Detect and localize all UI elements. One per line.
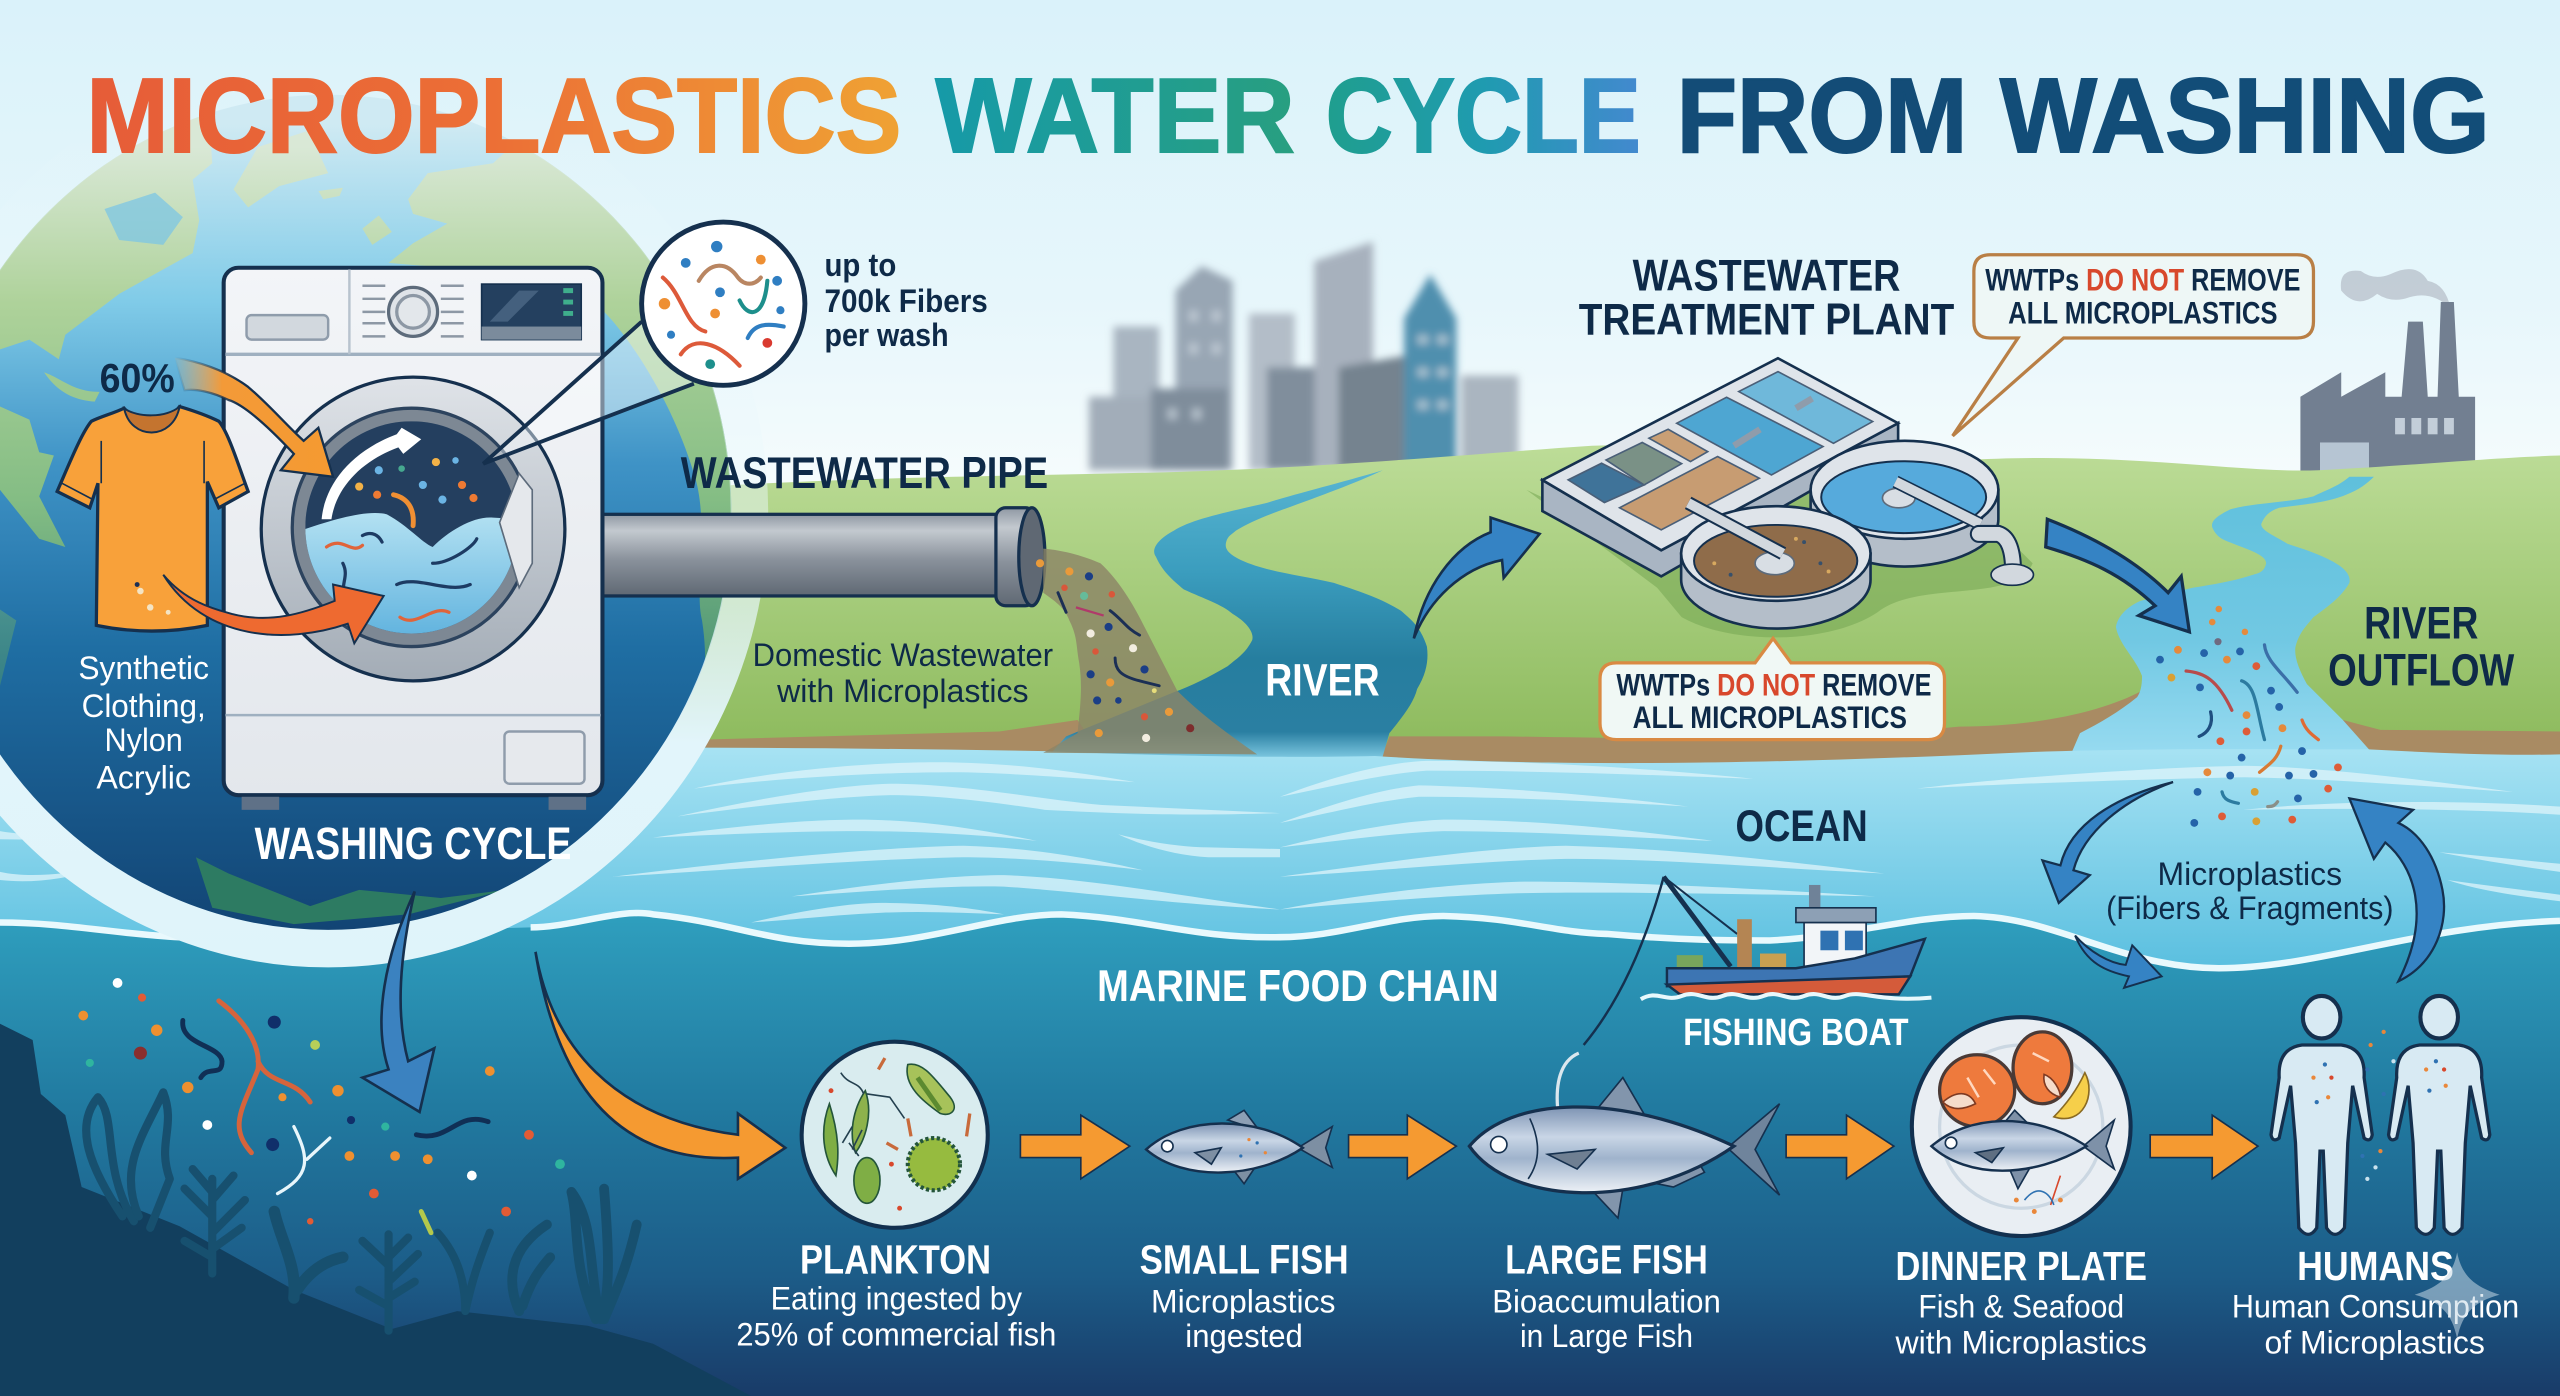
orange arrow to plankton: [536, 952, 785, 1179]
flow arrow 4: [2150, 1115, 2258, 1179]
marine food chain heading: MARINE FOOD CHAIN: [1097, 962, 1499, 1011]
callout: upper warning: [1953, 255, 2313, 436]
arrow: microplastics to sea: [2075, 936, 2162, 988]
flow arrow 2: [1349, 1115, 1456, 1179]
arrow: shirt fibres to water: [163, 575, 384, 643]
dinner plate label: with Microplastics: [1895, 1324, 2147, 1361]
waterline: [0, 913, 2560, 968]
microplastics label: (Fibers & Fragments): [2106, 889, 2393, 926]
title: [87, 57, 2490, 175]
ocean label: OCEAN: [1736, 802, 1868, 851]
sky background: [0, 0, 2560, 490]
river outflow label: [2328, 597, 2515, 696]
small fish label: [1140, 1237, 1349, 1354]
underwater body: [0, 913, 2560, 1396]
clothing label: Acrylic: [96, 759, 191, 796]
large fish label: in Large Fish: [1520, 1317, 1693, 1354]
bubble label: per wash: [824, 316, 949, 353]
microplastics label: [2106, 855, 2393, 926]
clothing label: [78, 649, 209, 796]
factory with smoke: [2300, 269, 2475, 475]
humans label: HUMANS: [2297, 1243, 2454, 1289]
city river: [1038, 470, 1427, 767]
globe ring: [0, 77, 749, 949]
river outflow label: OUTFLOW: [2328, 645, 2515, 696]
title: FROM: [1677, 57, 1967, 175]
drum: [305, 421, 522, 640]
domestic wastewater label: Domestic Wastewater: [753, 636, 1053, 673]
arrow: river to plant: [1414, 518, 1540, 638]
human right: [2389, 996, 2490, 1234]
humans label: Human Consumption: [2232, 1288, 2519, 1325]
wastewater pipe heading: WASTEWATER PIPE: [681, 449, 1048, 498]
wastewater pipe: [602, 508, 1045, 606]
plant heading: WASTEWATER: [1633, 252, 1900, 301]
small fish label: Microplastics: [1151, 1283, 1336, 1320]
spin arrow: [322, 428, 421, 519]
humans label: of Microplastics: [2264, 1324, 2485, 1361]
clothing label: Nylon: [104, 721, 183, 758]
title: WATER: [936, 57, 1295, 175]
dinner plate label: [1895, 1243, 2147, 1361]
plankton circle: [802, 1042, 988, 1228]
detergent drawer: [247, 315, 328, 340]
ocean surface: [0, 748, 2560, 980]
river outflow label: RIVER: [2364, 597, 2478, 648]
title: CYCLE: [1326, 57, 1641, 175]
arrow: plant to outflow: [2046, 519, 2189, 632]
plant heading: [1579, 252, 1954, 345]
callout: upper warning: WWTPs DO NOT REMOVE: [1985, 263, 2300, 298]
clothing label: Clothing,: [82, 687, 206, 724]
humans label: [2232, 1243, 2519, 1361]
plant shadow: [1527, 441, 2033, 637]
dial: [362, 286, 464, 336]
city skyline: [1089, 242, 1518, 470]
large fish label: Bioaccumulation: [1492, 1283, 1721, 1320]
dinner plate: [1912, 1017, 2131, 1236]
river outflow stream: [2065, 477, 2384, 767]
washing cycle heading: WASHING CYCLE: [255, 818, 571, 869]
small fish label: SMALL FISH: [1140, 1237, 1349, 1283]
clarifier blue: [1811, 441, 1998, 567]
river label: RIVER: [1265, 655, 1380, 706]
surface waves: [0, 761, 2560, 923]
green land with river banks: [653, 445, 2560, 776]
domestic wastewater label: with Microplastics: [776, 672, 1029, 709]
door: [261, 377, 565, 681]
callout: upper warning: ALL MICROPLASTICS: [2008, 295, 2278, 330]
callout: lower warning: WWTPs DO NOT REMOVE: [1616, 668, 1931, 703]
sparkle mark: [2415, 1252, 2500, 1339]
display panel: [482, 284, 581, 340]
flow arrow 3: [1786, 1115, 1894, 1179]
outflow microplastics: [2156, 606, 2342, 827]
dinner plate label: DINNER PLATE: [1896, 1243, 2147, 1289]
seaweed: [86, 1092, 637, 1331]
outlet pipe: [1979, 534, 2033, 585]
arrow: shirt to drum: [175, 358, 333, 477]
bubble label: [824, 246, 988, 353]
small fish: [1146, 1110, 1332, 1184]
bubble label: up to: [824, 246, 896, 283]
large fish: [1469, 1078, 1780, 1218]
machine body: [224, 268, 602, 795]
plankton label: Eating ingested by: [771, 1279, 1023, 1316]
treatment plant: [1527, 358, 2033, 637]
microplastics label: Microplastics: [2158, 855, 2342, 892]
plankton label: PLANKTON: [800, 1237, 991, 1283]
particles between humans: [2360, 1030, 2396, 1181]
large fish label: LARGE FISH: [1505, 1237, 1708, 1283]
fishing line and hook: [1557, 877, 1664, 1107]
60% label: 60%: [100, 355, 175, 401]
callout: lower warning: [1600, 638, 1944, 740]
domestic wastewater label: [753, 636, 1053, 709]
cycle arrow left: [2042, 782, 2173, 903]
blue arrow sinking: [362, 891, 434, 1112]
large fish label: [1492, 1237, 1721, 1354]
flow arrow 1: [1020, 1115, 1130, 1179]
fishing boat label: FISHING BOAT: [1683, 1011, 1909, 1053]
cycle arrow right: [2349, 798, 2444, 981]
globe: [0, 95, 784, 931]
basin block: [1542, 423, 1898, 576]
title: WASHING: [2000, 57, 2490, 175]
human left: [2271, 996, 2372, 1234]
seabed: [0, 1024, 751, 1396]
plankton label: [736, 1237, 1056, 1352]
drawer button: [504, 731, 584, 784]
plankton label: 25% of commercial fish: [736, 1315, 1056, 1352]
callout lines to fiber bubble: [483, 322, 694, 464]
fiber bubble: [642, 222, 805, 385]
title: MICROPLASTICS: [87, 57, 901, 175]
t-shirt: [57, 407, 248, 631]
plant heading: TREATMENT PLANT: [1579, 296, 1954, 345]
small fish label: ingested: [1185, 1317, 1303, 1354]
bubble label: 700k Fibers: [824, 282, 988, 319]
callout: lower warning: ALL MICROPLASTICS: [1633, 700, 1907, 735]
washing machine: [224, 268, 602, 810]
wastewater plume: [1036, 549, 1257, 754]
sea microplastics: [78, 978, 565, 1233]
fishing boat: [1641, 877, 1931, 999]
clothing label: Synthetic: [78, 649, 209, 686]
dinner plate label: Fish & Seafood: [1918, 1288, 2124, 1325]
clarifier brown: [1681, 503, 1871, 629]
